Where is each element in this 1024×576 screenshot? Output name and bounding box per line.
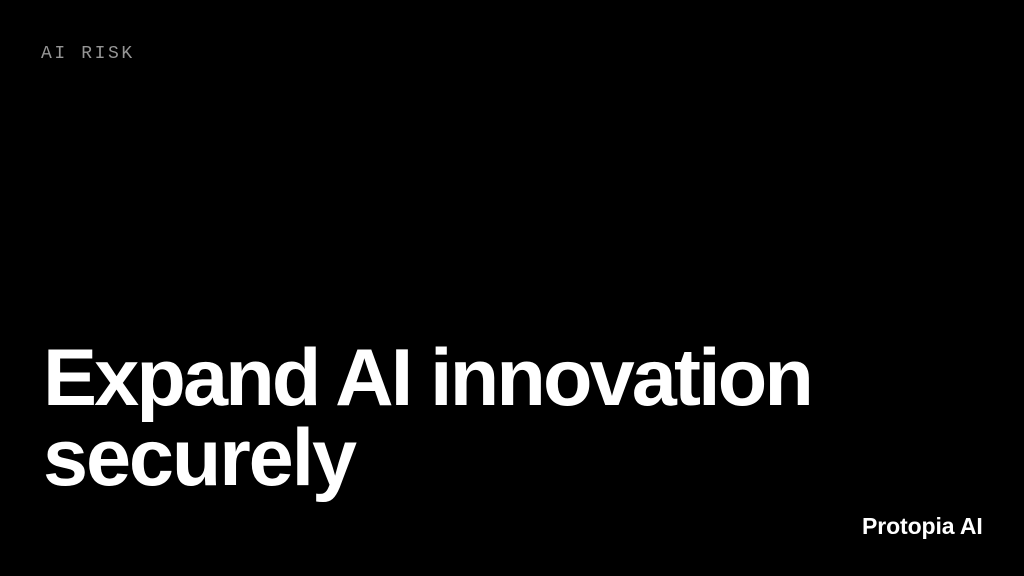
logo wordmark: Protopia AI bbox=[862, 513, 983, 539]
kicker label: AI RISK bbox=[41, 44, 135, 64]
title bbox=[43, 333, 811, 503]
title: securely bbox=[43, 413, 355, 503]
title: Expand AI innovation bbox=[43, 333, 811, 423]
